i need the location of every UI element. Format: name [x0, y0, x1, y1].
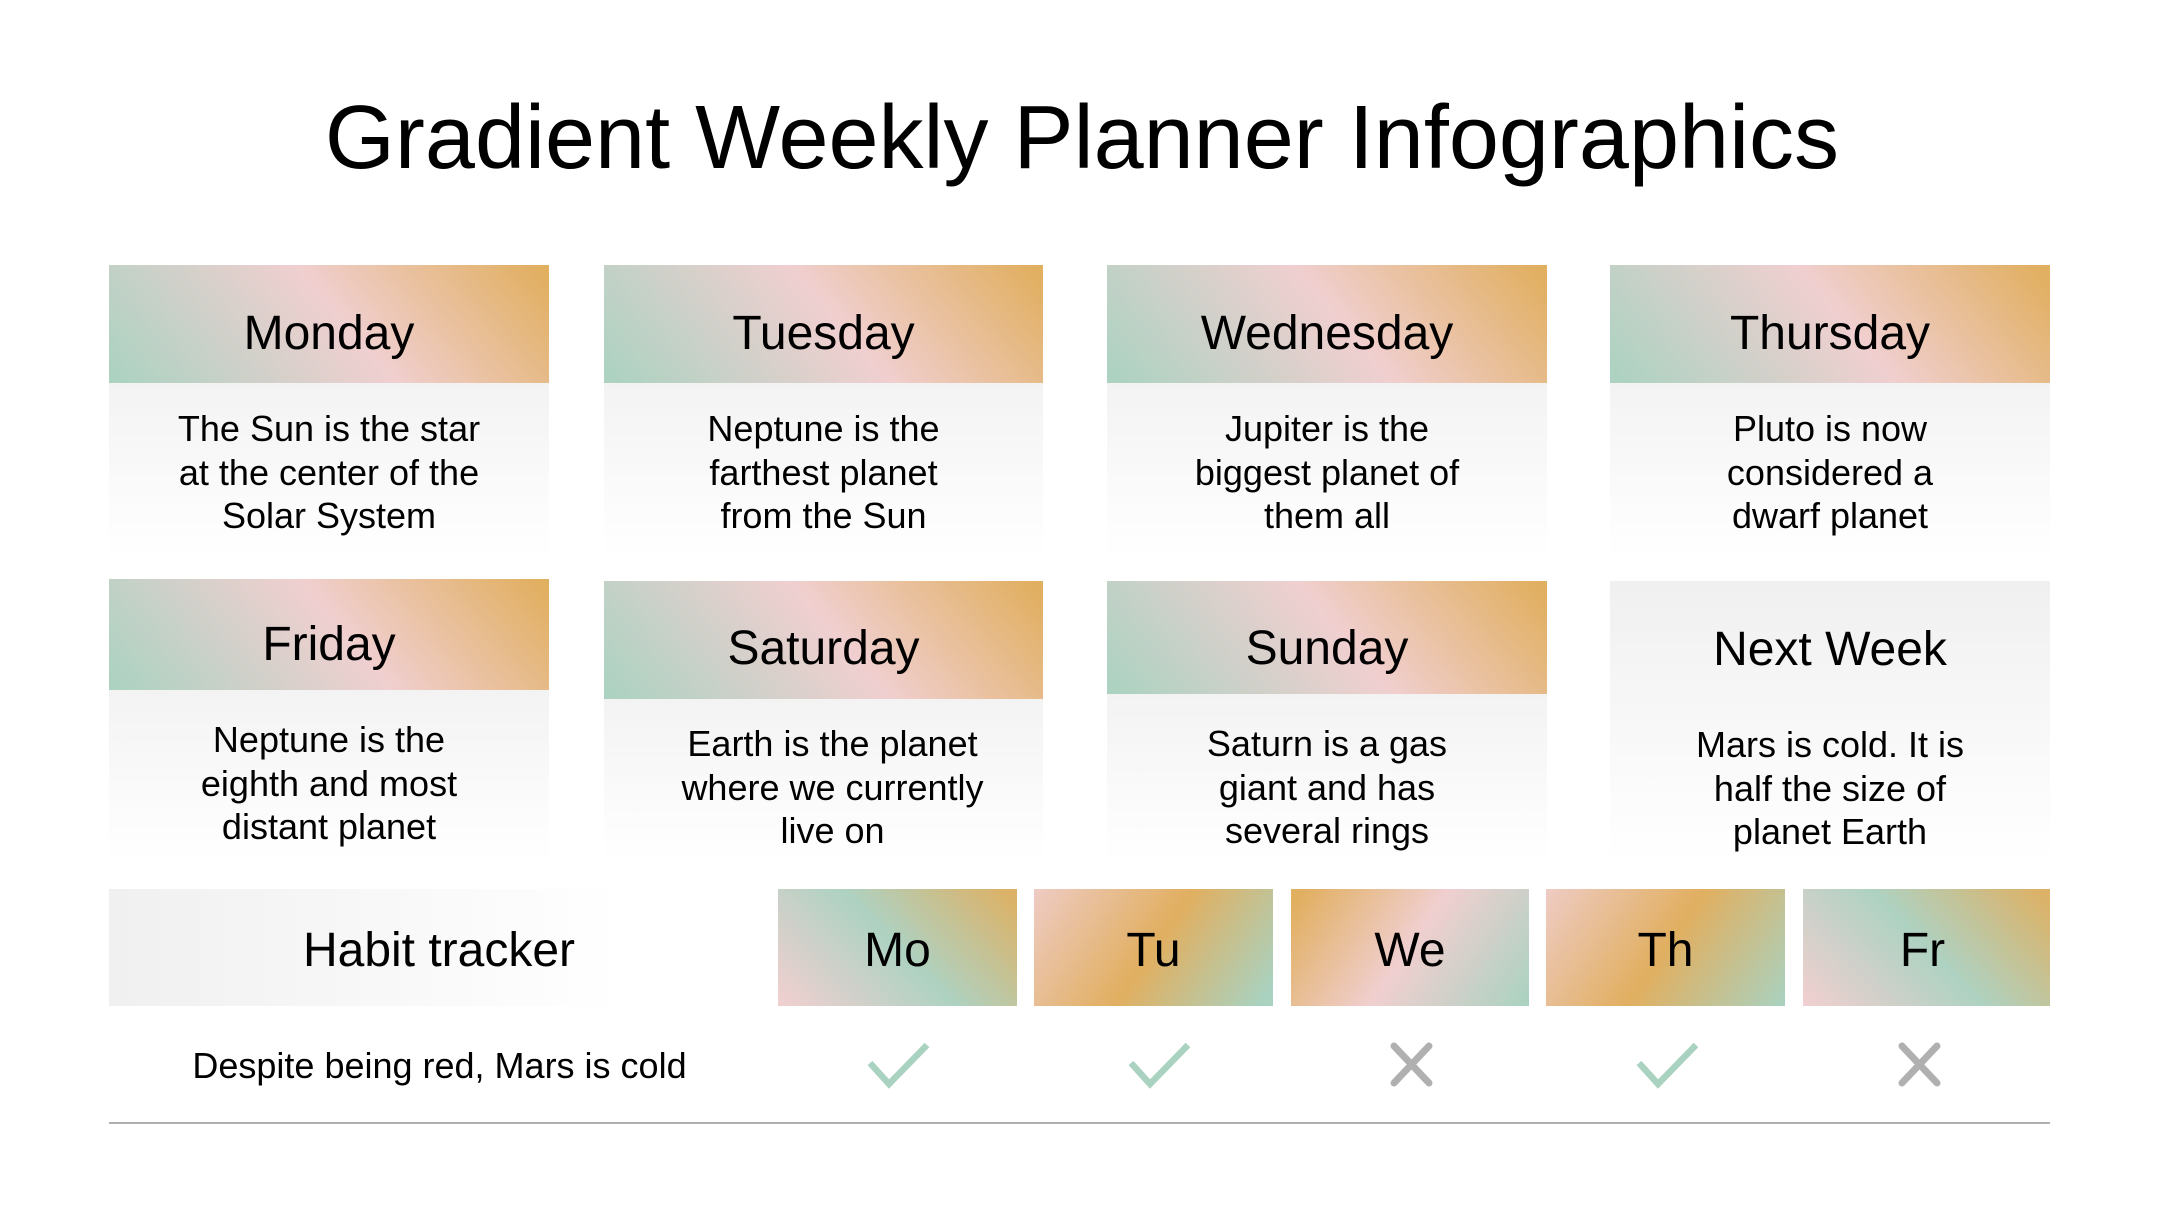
- day tile: Mo: [778, 889, 1017, 1006]
- panel: Sunday: [1107, 581, 1547, 851]
- Saturday text: [681, 723, 984, 851]
- Sunday text: giant and has: [1219, 766, 1435, 808]
- panel: Thursday: [1610, 265, 2050, 536]
- day tile: Fr: [1803, 889, 2050, 1006]
- Monday text: at the center of the: [179, 452, 479, 492]
- Friday body background: [109, 690, 549, 861]
- day tile: Tu: [1034, 889, 1273, 1006]
- icon: check Thursday: [1639, 1045, 1696, 1084]
- Thursday header band: [1610, 265, 2050, 383]
- Wednesday text: biggest planet of: [1195, 452, 1459, 492]
- day tile: Fr: Fr: [1900, 924, 1945, 977]
- title: Gradient Weekly Planner Infographics: [325, 88, 1839, 188]
- Tuesday header band: [604, 265, 1043, 383]
- Next Week text: [1696, 724, 1964, 852]
- panel: Monday: [109, 265, 549, 536]
- day tile: Mo: Mo: [864, 924, 931, 977]
- day tile: We: [1291, 889, 1529, 1006]
- Friday text: Neptune is the: [213, 719, 445, 760]
- habit description: Despite being red, Mars is cold: [192, 1045, 687, 1086]
- panel: Saturday: [604, 581, 1043, 851]
- Sunday heading: Sunday: [1246, 622, 1408, 675]
- Saturday heading: Saturday: [727, 622, 920, 675]
- Friday header band: [109, 579, 549, 690]
- panel: Tuesday: [604, 265, 1043, 536]
- habit tracker label: [109, 889, 623, 1006]
- Friday text: distant planet: [222, 806, 436, 847]
- Next Week text: Mars is cold. It is: [1696, 724, 1964, 765]
- Sunday text: Saturn is a gas: [1207, 723, 1447, 764]
- day tile: Tu: Tu: [1126, 924, 1181, 977]
- Wednesday text: Jupiter is the: [1225, 408, 1429, 449]
- Thursday text: [1727, 408, 1934, 536]
- panel: Wednesday: [1107, 265, 1547, 536]
- Thursday text: Pluto is now: [1733, 408, 1927, 449]
- Next Week heading: Next Week: [1713, 623, 1947, 676]
- Next Week text: half the size of: [1714, 768, 1946, 808]
- Thursday heading: Thursday: [1730, 307, 1930, 360]
- Tuesday body background: [604, 383, 1043, 558]
- Monday header band: [109, 265, 549, 383]
- Sunday header band: [1107, 581, 1547, 694]
- Tuesday text: from the Sun: [720, 495, 927, 536]
- Saturday header band: [604, 581, 1043, 699]
- table bottom rule: [109, 1122, 2050, 1124]
- icon: check Tuesday: [1131, 1045, 1188, 1084]
- Tuesday text: [707, 408, 940, 536]
- day tile: Th: [1546, 889, 1785, 1006]
- Monday text: Solar System: [222, 495, 436, 536]
- icon: cross Wednesday: [1394, 1046, 1429, 1083]
- icon: cross Friday: [1902, 1046, 1937, 1083]
- Wednesday text: them all: [1264, 495, 1390, 536]
- Sunday text: several rings: [1225, 810, 1429, 851]
- habit tracker label: Habit tracker: [303, 924, 575, 977]
- Thursday body background: [1610, 383, 2050, 558]
- Tuesday text: farthest planet: [709, 452, 938, 492]
- Next Week text: planet Earth: [1733, 811, 1927, 852]
- Tuesday heading: Tuesday: [732, 307, 915, 360]
- Thursday text: considered a: [1727, 452, 1933, 492]
- Saturday text: Earth is the planet: [687, 723, 978, 764]
- Monday heading: Monday: [244, 307, 414, 360]
- Sunday text: [1207, 723, 1447, 851]
- Wednesday heading: Wednesday: [1201, 307, 1453, 360]
- day tile: We: We: [1374, 924, 1446, 977]
- Saturday text: where we currently: [681, 766, 984, 808]
- Monday text: [178, 408, 480, 536]
- Saturday body background: [604, 699, 1043, 861]
- Thursday text: dwarf planet: [1732, 495, 1928, 536]
- Sunday body background: [1107, 694, 1547, 861]
- Tuesday text: Neptune is the: [707, 408, 940, 449]
- panel: Next Week: [1610, 581, 2050, 861]
- Wednesday text: [1195, 408, 1460, 536]
- Friday text: eighth and most: [201, 762, 457, 804]
- icon: check Monday: [870, 1045, 927, 1084]
- panel: Friday: [109, 579, 549, 847]
- Monday text: The Sun is the star: [178, 408, 480, 449]
- Saturday text: live on: [780, 810, 885, 851]
- day tile: Th: Th: [1637, 924, 1694, 977]
- Friday text: [201, 719, 457, 847]
- Wednesday header band: [1107, 265, 1547, 383]
- Monday body background: [109, 383, 549, 558]
- Wednesday body background: [1107, 383, 1547, 558]
- Friday heading: Friday: [262, 618, 396, 671]
